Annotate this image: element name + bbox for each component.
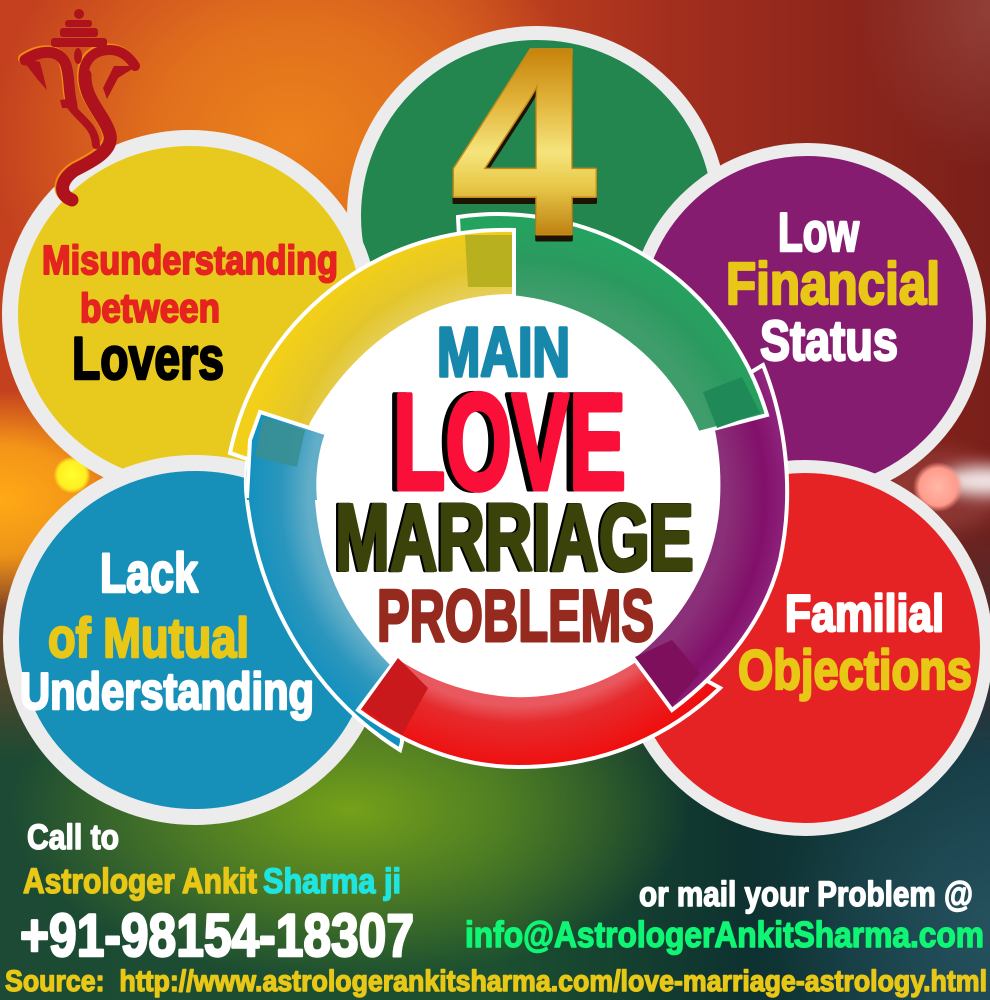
label: low financial status: Status bbox=[760, 309, 898, 373]
title: main love marriage problems: MARRIAGE bbox=[335, 485, 694, 591]
central white disc bbox=[292, 271, 744, 723]
overlap patch: olive bbox=[465, 235, 512, 287]
overlap patch: dark purple bbox=[635, 640, 700, 706]
label: misunderstanding between lovers: Misunderstanding bbox=[42, 237, 338, 283]
label: low financial status: Financial bbox=[726, 251, 940, 317]
title: main love marriage problems: LOVE bbox=[393, 366, 626, 519]
label: lack of mutual understanding: of Mutual bbox=[48, 606, 249, 669]
segment: yellow bbox=[230, 230, 514, 480]
title: main love marriage problems: PROBLEMS bbox=[377, 576, 654, 657]
segment: red bbox=[358, 650, 720, 767]
label: familial objections bbox=[738, 585, 972, 701]
title: main love marriage problems: MAIN bbox=[437, 313, 570, 391]
segment: blue bbox=[246, 412, 402, 750]
contact: call block: Astrologer Ankit bbox=[23, 862, 257, 901]
ganesha emblem bbox=[21, 9, 137, 200]
label: lack of mutual understanding bbox=[20, 541, 314, 721]
circle: yellow bbox=[10, 138, 370, 490]
contact: call block: Call to bbox=[27, 818, 119, 857]
label: misunderstanding between lovers bbox=[42, 237, 338, 392]
light flare right bbox=[885, 450, 990, 530]
circle: red bbox=[624, 466, 986, 830]
circle: blue bbox=[11, 463, 379, 817]
ring segments bbox=[230, 214, 787, 767]
segment: purple bbox=[633, 365, 787, 710]
circle: green bbox=[354, 33, 720, 399]
segment: green bbox=[458, 214, 767, 433]
contact: mail block bbox=[465, 875, 984, 955]
overlap patch: teal bbox=[255, 418, 305, 467]
light flare left bbox=[54, 457, 90, 493]
title: main love marriage problems bbox=[333, 313, 694, 657]
contact: call block bbox=[20, 818, 414, 969]
overlap patch: dark red bbox=[362, 658, 428, 735]
label: low financial status: Low bbox=[778, 201, 859, 263]
label: lack of mutual understanding: Understanding bbox=[20, 663, 314, 721]
label: misunderstanding between lovers: Lovers bbox=[72, 325, 224, 392]
contact: call block: Sharma ji bbox=[263, 862, 401, 901]
label: low financial status bbox=[726, 201, 940, 373]
blue segment outline bbox=[247, 412, 325, 498]
overlap patch: dark green bbox=[703, 377, 760, 428]
title: main love marriage problems: LOVE bbox=[388, 366, 619, 519]
label: familial objections: Familial bbox=[785, 585, 944, 643]
label: lack of mutual understanding: Lack bbox=[100, 541, 199, 604]
circle: purple bbox=[634, 150, 980, 494]
blue segment head bbox=[246, 412, 325, 500]
numeral 4: 4 bbox=[450, 0, 599, 297]
background lower green area bbox=[0, 523, 990, 1000]
contact: call block: +91-98154-18307 bbox=[20, 902, 414, 969]
label: misunderstanding between lovers: between bbox=[80, 285, 220, 331]
title: main love marriage problems: MARRIAGE bbox=[333, 485, 692, 591]
